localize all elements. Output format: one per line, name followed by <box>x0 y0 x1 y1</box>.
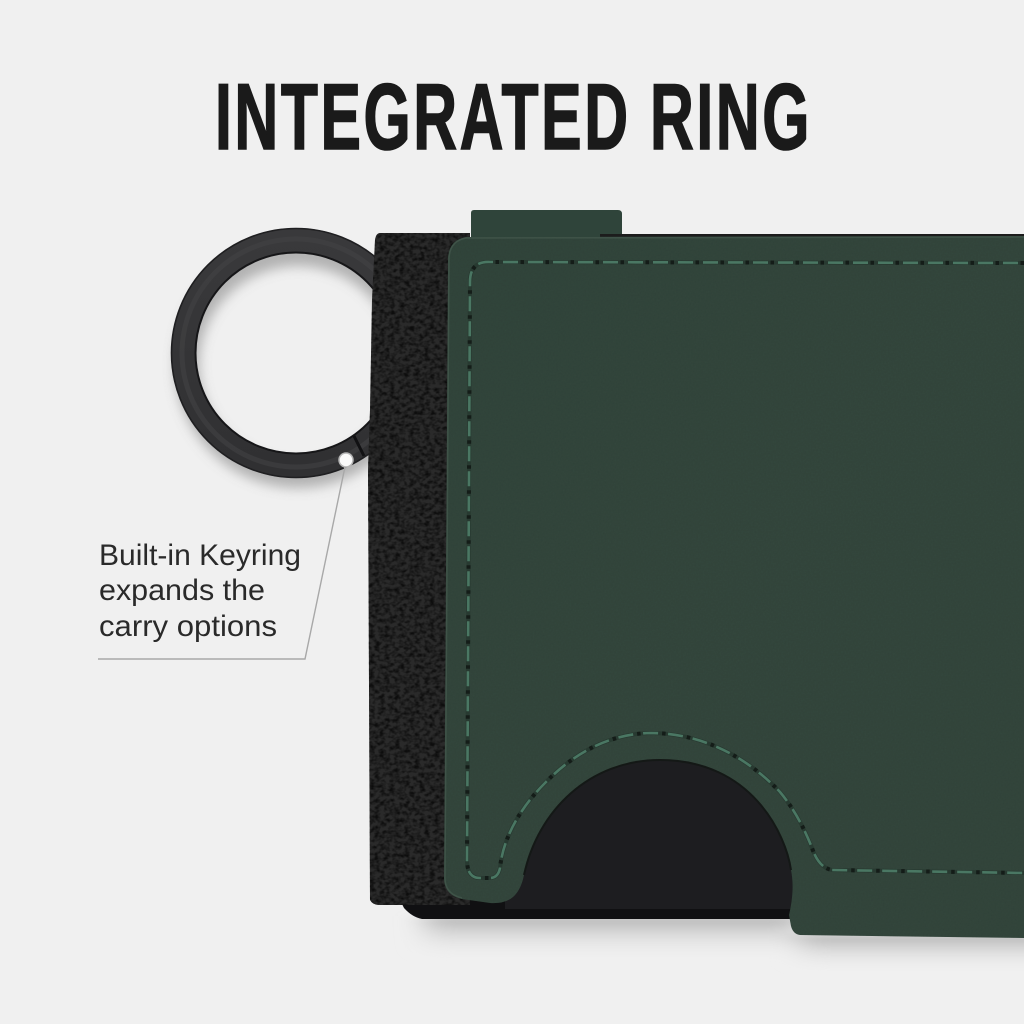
callout text: Built-in Keyring <box>99 539 301 572</box>
callout text: expands the <box>99 574 265 607</box>
ring inner edge <box>196 252 396 454</box>
metal card edge <box>400 900 795 919</box>
ring body <box>184 240 408 466</box>
stitching <box>467 262 1024 878</box>
green thread <box>467 262 1024 878</box>
stitch holes <box>467 262 1024 878</box>
ring gate joint <box>354 436 364 456</box>
leather edge highlight <box>445 237 1024 898</box>
keyring <box>172 228 420 478</box>
leather panel <box>444 236 1024 938</box>
card interior seen through notch <box>505 760 800 909</box>
callout text: carry options <box>99 610 277 643</box>
callout dot <box>339 453 353 467</box>
top leather tab <box>471 210 622 240</box>
callout leader line <box>98 462 346 659</box>
ring shadow <box>187 254 409 476</box>
ring outer edge <box>172 228 420 478</box>
stitch groove <box>467 262 1024 878</box>
elastic band <box>368 233 470 905</box>
notch edge shadow <box>524 760 791 875</box>
ring highlight <box>182 239 410 467</box>
black back band <box>600 234 1024 254</box>
callout text <box>99 539 301 643</box>
wallet shadow <box>425 916 1024 972</box>
